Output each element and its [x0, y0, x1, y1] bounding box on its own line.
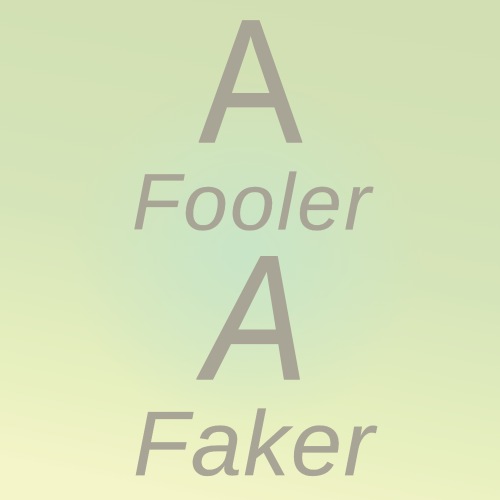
- large italic letter A: A: [196, 219, 307, 417]
- word: Faker: Faker: [133, 393, 378, 495]
- word: Fooler: Fooler: [132, 158, 374, 246]
